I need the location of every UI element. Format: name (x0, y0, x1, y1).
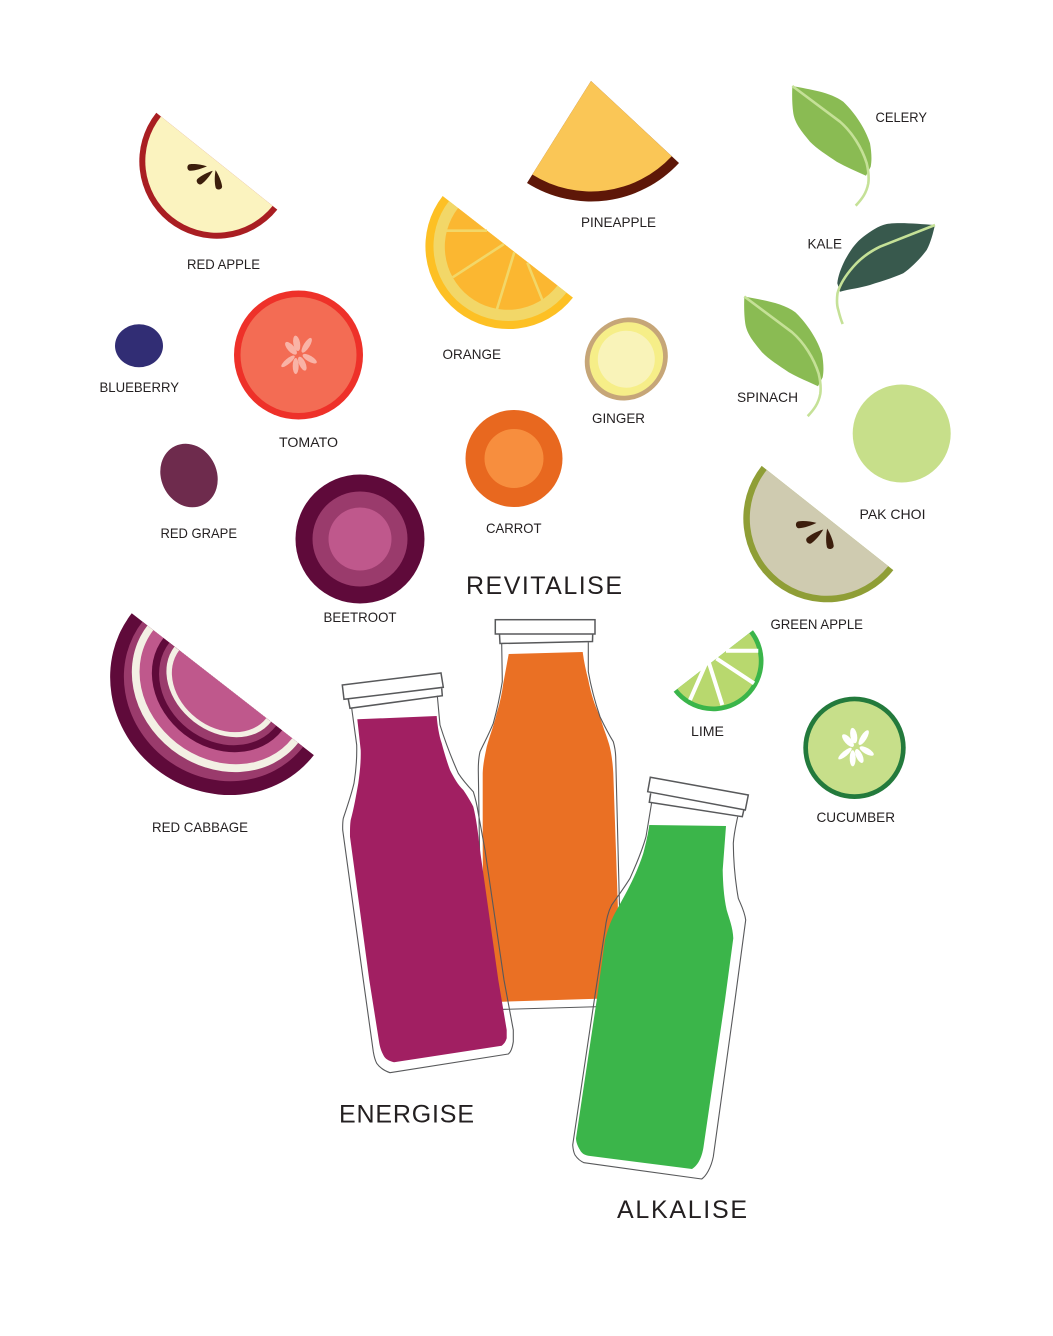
bottle outline: green (573, 802, 746, 1179)
ingredient: kale (808, 223, 935, 324)
heading: revitalise: REVITALISE (466, 572, 622, 600)
label: kale: KALE (808, 236, 842, 252)
ingredient: pineapple (527, 81, 679, 230)
icon: carrot slice (466, 410, 562, 507)
icon: ginger slice (568, 300, 685, 418)
bottle: alkalise (green) (573, 777, 748, 1179)
bottle outline: purple (343, 696, 513, 1073)
ingredient: beetroot (296, 474, 424, 625)
ingredient: blueberry (100, 324, 180, 395)
ingredient: red apple (108, 113, 277, 272)
bottle outline: orange (478, 642, 622, 1010)
icon: lime slice (674, 630, 784, 731)
ingredient: pak choi (853, 384, 951, 522)
label: tomato: TOMATO (279, 434, 338, 450)
heading: alkalise: ALKALISE (617, 1196, 747, 1224)
label: spinach: SPINACH (737, 389, 798, 405)
label: blueberry: BLUEBERRY (100, 379, 180, 395)
bottle cap: green (648, 777, 748, 817)
label: pak choi: PAK CHOI (860, 506, 926, 522)
icon: kale leaf (837, 223, 935, 324)
label: cucumber: CUCUMBER (816, 809, 895, 825)
icon: red grape (150, 434, 228, 517)
label: orange: ORANGE (442, 346, 501, 362)
icon: tomato slice (234, 290, 363, 420)
bottle: energise (purple) (342, 673, 513, 1073)
icon: beetroot slice (296, 474, 424, 604)
icon: pak choi disc (853, 384, 951, 482)
label: red cabbage: RED CABBAGE (152, 819, 248, 835)
label: green apple: GREEN APPLE (770, 616, 863, 632)
icon: spinach leaf (744, 296, 823, 416)
bottle liquid: green (576, 825, 733, 1169)
label: lime: LIME (691, 723, 724, 739)
bottle liquid: purple (350, 716, 507, 1062)
ingredient: celery (792, 86, 928, 206)
ingredient: lime (674, 630, 784, 739)
label: pineapple: PINEAPPLE (581, 214, 656, 230)
label: ginger: GINGER (592, 410, 645, 426)
bottle: revitalise (orange) (478, 620, 622, 1010)
icon: pineapple wedge (527, 81, 679, 201)
ingredient: red cabbage (65, 613, 314, 840)
ingredient: orange (392, 196, 573, 362)
icon: green apple slice (709, 466, 893, 636)
label: celery: CELERY (876, 109, 928, 125)
ingredient: ginger (568, 300, 685, 426)
ingredient: spinach (737, 296, 823, 416)
label: carrot: CARROT (486, 520, 542, 536)
icon: red apple slice (108, 113, 277, 270)
bottle cap: purple (342, 673, 443, 708)
heading: energise: ENERGISE (339, 1101, 474, 1129)
label: red grape: RED GRAPE (160, 525, 237, 541)
bottle liquid: orange (483, 652, 621, 1002)
ingredient: carrot (466, 410, 562, 536)
ingredient: red grape (150, 434, 237, 541)
icon: celery leaf (792, 86, 871, 206)
ingredient: tomato (234, 290, 363, 450)
ingredient: green apple (709, 466, 893, 636)
ingredient: cucumber (803, 697, 906, 825)
label: red apple: RED APPLE (187, 256, 260, 272)
bottle cap: orange (495, 620, 595, 644)
icon: orange slice (392, 196, 573, 362)
icon: red cabbage half (65, 613, 314, 840)
icon: cucumber slice (803, 697, 906, 799)
icon: blueberry (115, 324, 163, 367)
label: beetroot: BEETROOT (324, 609, 397, 625)
